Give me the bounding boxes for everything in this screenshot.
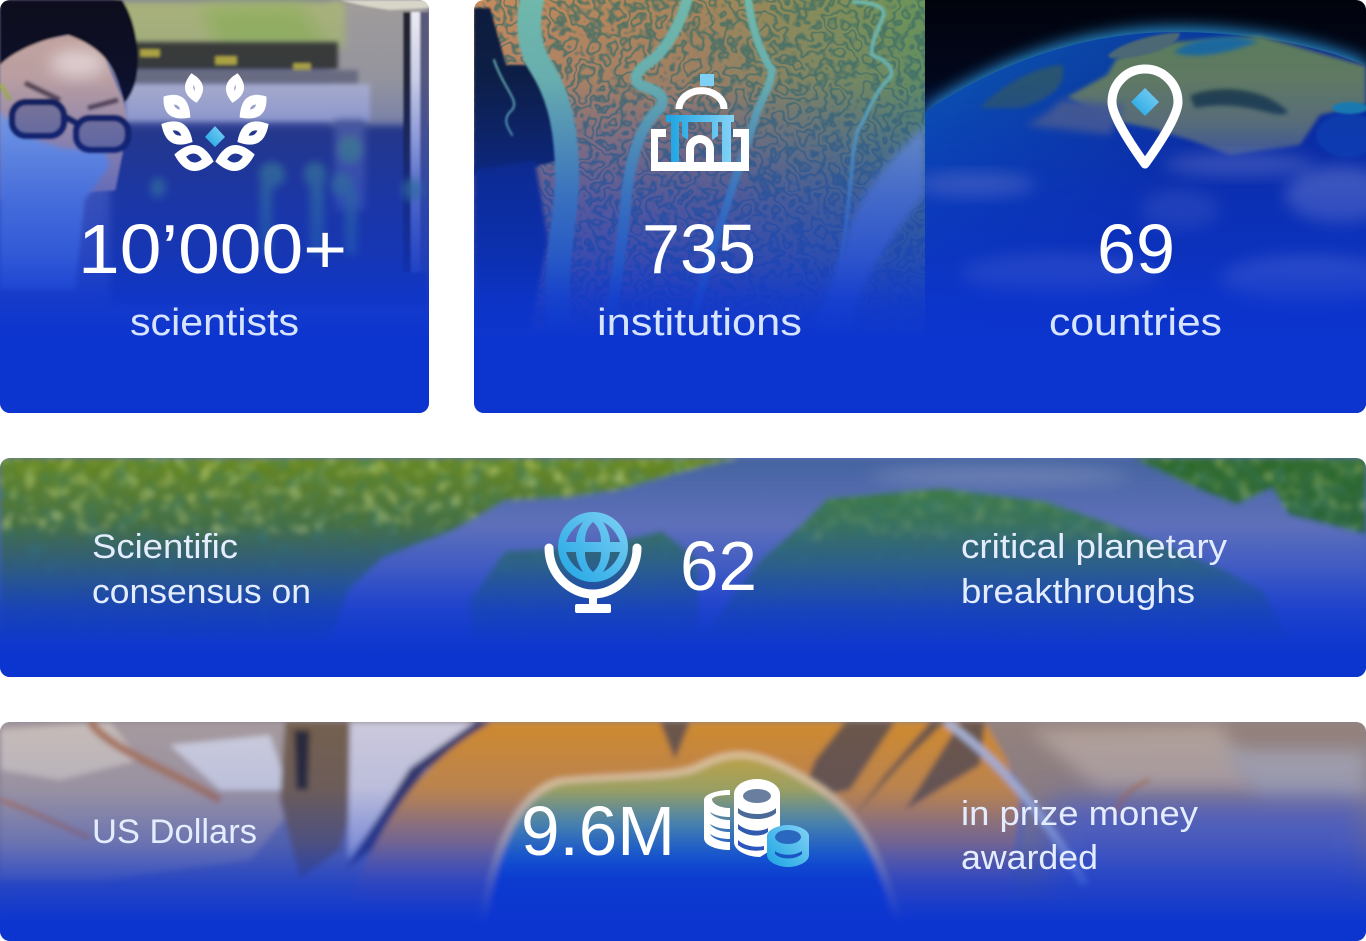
gradient overlay [0,0,429,413]
photo: earth and atmosphere [915,0,1366,413]
photo: scientist in laboratory [0,0,429,413]
photo: mangrove forest and river [0,458,1366,677]
text: US Dollars: US Dollars [92,813,257,851]
label: institutions: institutions [597,302,802,344]
text: critical planetary breakthroughs: breakthroughs [961,573,1195,611]
icon: map pin [1112,69,1178,164]
text: in prize money awarded [961,795,1198,877]
number: 735: 735 [642,210,756,288]
text: critical planetary breakthroughs [961,528,1227,611]
number: 10'000+: 10’000+ [78,210,347,288]
label: countries: countries [1049,302,1222,344]
label: scientists: scientists [130,302,299,344]
photos clipped to the rounded panel [474,0,1366,413]
panel: prize money [0,722,1366,941]
text: in prize money awarded: awarded [961,839,1098,877]
gradient overlay [0,722,1366,941]
panel: institutions and countries [474,0,1366,413]
number: 62: 62 [680,527,757,605]
icon: institution building [651,74,749,171]
photo: river delta from orbit [474,0,925,413]
icon: laurel wreath [156,72,274,174]
text: Scientific consensus on: Scientific [92,528,238,566]
number: 69: 69 [1097,210,1175,288]
gradient overlay [0,458,1366,677]
panel: scientists [0,0,429,413]
text: in prize money awarded: in prize money [961,795,1198,833]
panel: scientific consensus [0,458,1366,677]
text: Scientific consensus on [92,528,311,611]
photo: geothermal landscape [0,722,1366,941]
text: Scientific consensus on: consensus on [92,573,311,611]
number: 9.6M: 9.6M [521,792,675,870]
gradient overlay [474,0,1366,413]
icon: desk globe [549,509,637,613]
icon: coin stacks [704,779,809,867]
text: critical planetary breakthroughs: critical planetary [961,528,1227,566]
